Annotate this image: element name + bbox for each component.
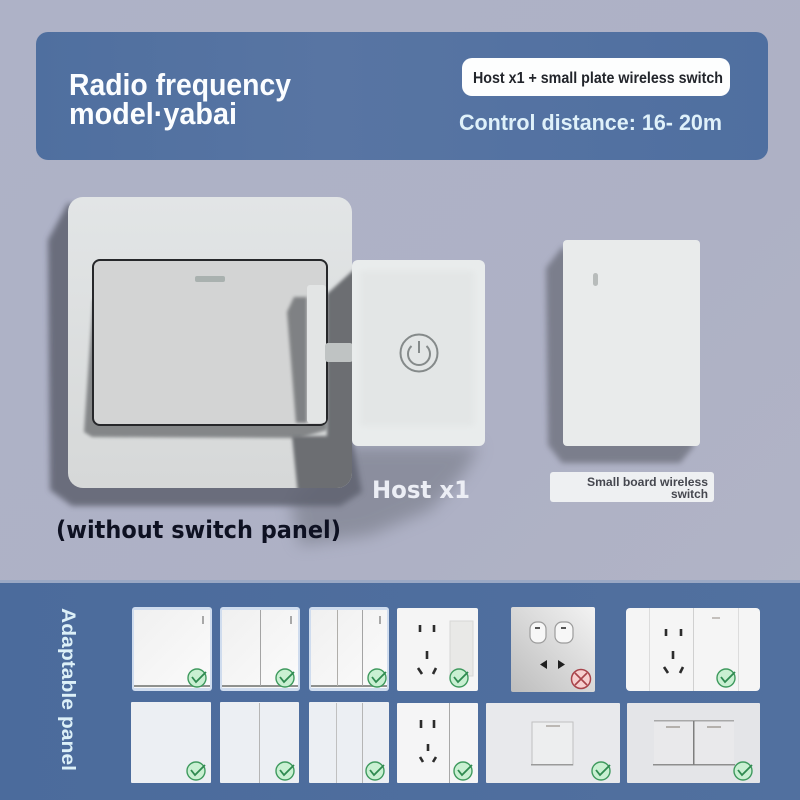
tile: socket with switch [397,608,478,691]
plate shadow on wall [48,203,362,506]
label: small board wireless switch [550,472,714,502]
small board wireless switch [546,240,700,463]
clip [307,285,326,423]
switch shadow [546,246,694,463]
tile: one gang [132,607,212,691]
shadows on plate [84,264,360,495]
rocker switch [93,260,327,425]
shadow of clip [287,297,307,423]
indicator [195,276,225,282]
icon: power button [400,334,438,372]
tile: three gang [309,607,389,691]
tile: flat socket with switch [397,703,478,783]
tile: flat two gang [220,702,299,783]
pill: package contents [462,58,730,96]
rocker cast shadow [84,300,327,438]
tile: flat one gang [131,702,211,783]
label: small board wireless switch: switch [671,487,708,501]
bottom band: adaptable panels [0,580,800,800]
control distance: Control distance: 16- 20m [459,110,722,135]
host unit on wall switch [48,197,485,545]
indicator [593,273,598,286]
note: without switch panel: (without switch panel) [56,516,341,544]
tile: flat three gang [309,702,389,783]
label: small board wireless switch: Small board wireless [587,475,708,489]
label: host x1: Host x1 [372,476,470,504]
tile: two gang [220,607,300,691]
icon: cross mark [572,670,590,688]
wall plate [68,197,352,488]
connector [325,343,353,362]
host box [352,260,485,446]
title [69,67,292,131]
host shadow on plate [290,268,352,488]
pill: package contents: Host x1 + small plate wireless switch [473,70,723,87]
host shadow on wall [290,446,480,545]
vertical heading: Adaptable panel [57,608,78,771]
tile: wide single rocker [486,703,620,783]
tile: unsupported socket [511,607,595,692]
title: Radio frequency [69,67,292,102]
tile: wide socket and switch [626,608,760,691]
tile: wide double rocker [627,703,760,783]
switch body [563,240,700,446]
header banner [36,32,768,160]
title: model·yabai [69,96,237,131]
